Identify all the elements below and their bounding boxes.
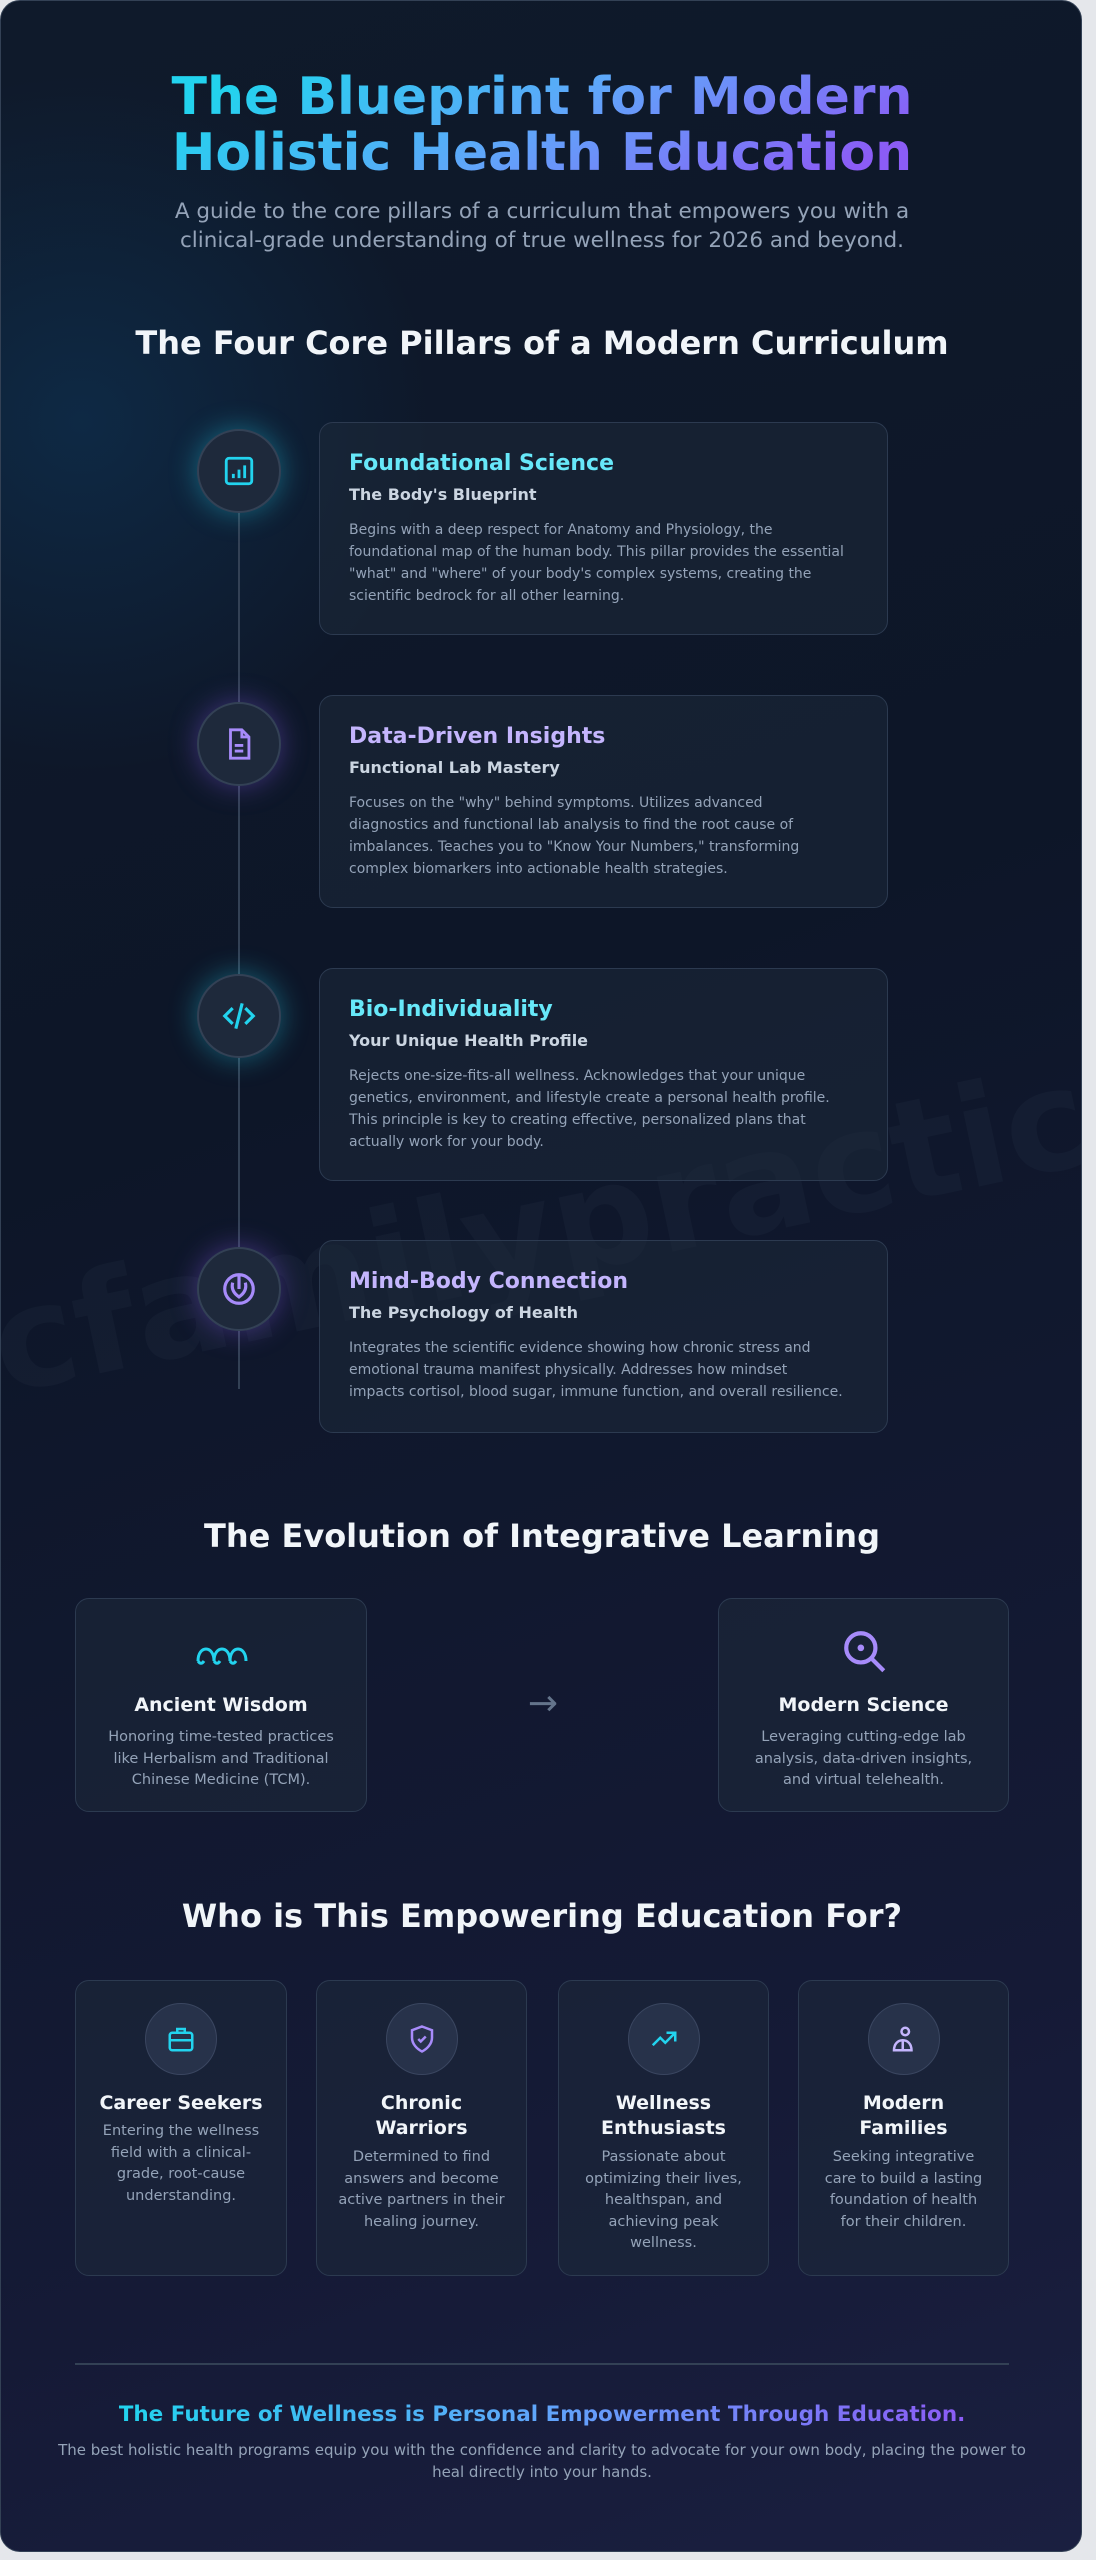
panel: data-driven: complex biomarkers into actionable health strategies. [349, 861, 728, 877]
panel: career seekers [75, 1980, 287, 2276]
panel: data-driven: Functional Lab Mastery [349, 758, 560, 777]
panel: wellness enthusiasts [558, 1980, 769, 2276]
panel: data-driven: diagnostics and functional lab analysis to find the root cause of [349, 817, 793, 833]
heading: who: Who is This Empowering Education For? [182, 1897, 902, 1935]
panel: data-driven: imbalances. Teaches you to "Know Your Numbers," transforming [349, 839, 799, 855]
divider [75, 2363, 1009, 2365]
panel: wellness enthusiasts: Passionate about optimizing their lives, healthspan, and achieving peak wellness. [585, 2149, 742, 2251]
panel: chronic warriors: Warriors [375, 2117, 468, 2139]
footer heading: The Future of Wellness is Personal Empowerment Through Education. [119, 2402, 965, 2427]
title [162, 69, 922, 181]
panel: mind-body: Mind-Body Connection [349, 1269, 628, 1294]
panel: mind-body: impacts cortisol, blood sugar, immune function, and overall resilience. [349, 1384, 843, 1400]
panel: modern families: for their children. [841, 2214, 966, 2230]
icon: lotus [197, 1247, 281, 1331]
panel: bio-individuality: This principle is key to creating effective, personalized plans that [349, 1112, 806, 1128]
title: The Blueprint for Modern [172, 67, 912, 127]
panel: chronic warriors: Determined to find answers and become active partners in their healing journey. [338, 2149, 505, 2230]
panel: bio-individuality: Bio-Individuality [349, 997, 553, 1022]
panel: foundational science: Foundational Science [349, 451, 614, 476]
panel: ancient wisdom: Ancient Wisdom [134, 1694, 308, 1716]
panel: chronic warriors [316, 1980, 527, 2276]
arrow: → [528, 1683, 558, 1724]
panel: modern families: Families [859, 2117, 948, 2139]
subtitle: A guide to the core pillars of a curriculum that empowers you with a [175, 199, 909, 224]
panel: bio-individuality: Rejects one-size-fits-all wellness. Acknowledges that your unique [349, 1068, 805, 1084]
panel: wellness enthusiasts: Enthusiasts [601, 2117, 726, 2139]
footer text [58, 2441, 1026, 2481]
panel: mind-body: The Psychology of Health [349, 1303, 578, 1322]
panel: ancient wisdom [75, 1598, 367, 1812]
icon: document [197, 702, 281, 786]
title: Holistic Health Education [172, 123, 912, 183]
icon: magnifier [844, 1631, 886, 1672]
panel: chronic warriors: Chronic [381, 2092, 462, 2114]
panel: mind-body: Integrates the scientific evidence showing how chronic stress and [349, 1340, 811, 1356]
panel: ancient wisdom: Honoring time-tested practices like Herbalism and Traditional Chinese Medicine (TCM). [108, 1729, 334, 1788]
panel: wellness enthusiasts: Wellness [616, 2092, 711, 2114]
panel: modern families: care to build a lasting [825, 2170, 982, 2186]
heading: evolution: The Evolution of Integrative Learning [204, 1517, 880, 1555]
panel: foundational science: The Body's Blueprint [349, 485, 537, 504]
heading: four pillars: The Four Core Pillars of a Modern Curriculum [135, 324, 949, 362]
icon: code [197, 974, 281, 1058]
panel: mind-body [319, 1240, 888, 1433]
panel: modern science [718, 1598, 1009, 1812]
panel: foundational science: "what" and "where" of your body's complex systems, creating the [349, 566, 811, 582]
panel: modern families: foundation of health [830, 2192, 977, 2208]
panel: career seekers: Career Seekers [99, 2092, 263, 2114]
panel: bio-individuality: actually work for your body. [349, 1134, 544, 1150]
subtitle [175, 199, 909, 253]
footer text: The best holistic health programs equip you with the confidence and clarity to advocate for your own body, placing the power to [58, 2441, 1026, 2459]
panel: foundational science: foundational map of the human body. This pillar provides the essential [349, 544, 844, 560]
panel: foundational science: Begins with a deep respect for Anatomy and Physiology, the [349, 522, 773, 538]
panel: modern families: Seeking integrative [833, 2149, 974, 2165]
timeline line [238, 471, 240, 1389]
panel: foundational science [319, 422, 888, 635]
icon: chart [197, 429, 281, 513]
panel: bio-individuality: Your Unique Health Profile [349, 1031, 588, 1050]
panel: data-driven [319, 695, 888, 908]
panel: bio-individuality: genetics, environment, and lifestyle create a personal health profile. [349, 1090, 830, 1106]
panel: data-driven: Data-Driven Insights [349, 724, 605, 749]
panel: mind-body: emotional trauma manifest physically. Addresses how mindset [349, 1362, 787, 1378]
panel: foundational science: scientific bedrock for all other learning. [349, 588, 624, 604]
panel: data-driven: Focuses on the "why" behind symptoms. Utilizes advanced [349, 795, 763, 811]
panel: modern science: Leveraging cutting-edge lab analysis, data-driven insights, and virtual telehealth. [755, 1729, 972, 1788]
subtitle: clinical-grade understanding of true wellness for 2026 and beyond. [180, 228, 904, 253]
panel: modern science: Modern Science [778, 1694, 948, 1716]
panel: bio-individuality [319, 968, 888, 1181]
footer text: heal directly into your hands. [432, 2463, 652, 2481]
icon: waves [196, 1648, 248, 1665]
panel: modern families: Modern [863, 2092, 944, 2114]
panel: modern families [798, 1980, 1009, 2276]
panel: career seekers: Entering the wellness field with a clinical-grade, root-cause understanding. [103, 2123, 259, 2204]
